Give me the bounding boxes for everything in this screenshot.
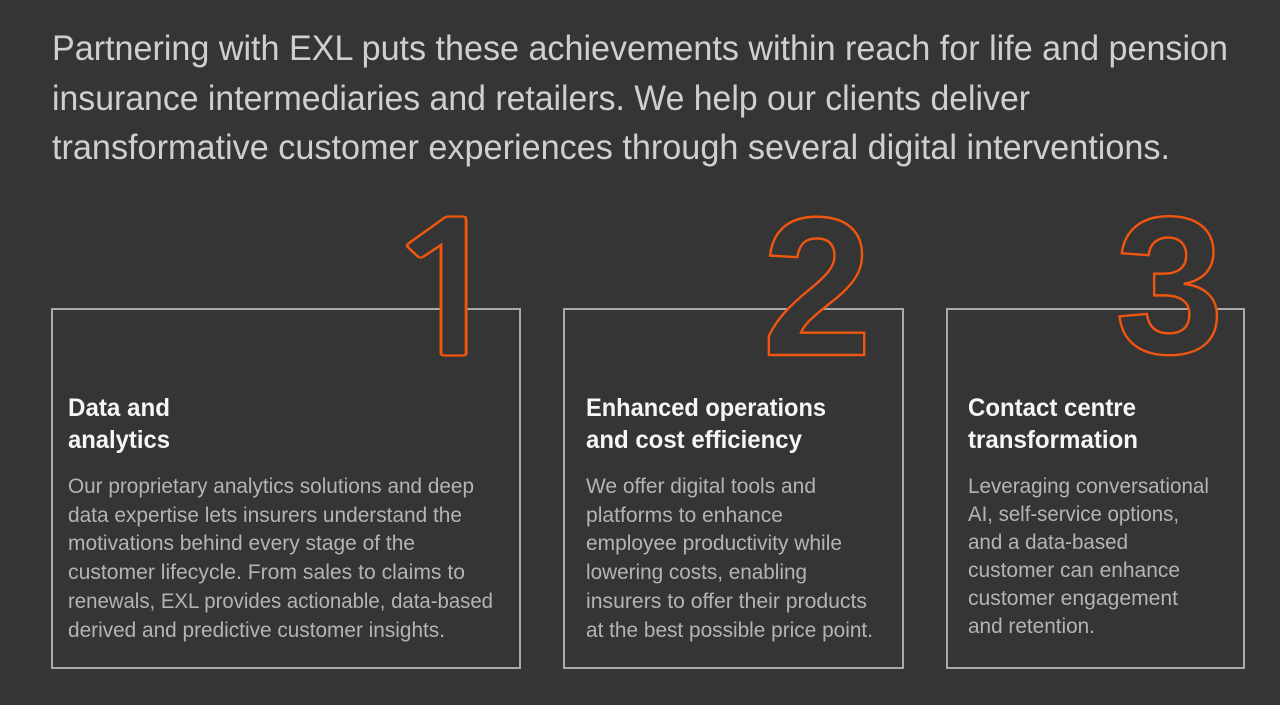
heading: enhanced operations: and cost efficiency — [586, 426, 802, 454]
text block: contact centre description — [968, 475, 1209, 638]
heading: enhanced operations: Enhanced operations — [586, 394, 826, 422]
heading: contact centre transformation — [968, 394, 1138, 454]
text block: contact centre description: and retention. — [968, 615, 1095, 638]
panel: enhanced operations and cost efficiency — [564, 176, 903, 668]
heading: contact centre transformation: Contact centre — [968, 394, 1136, 422]
title: introductory statement: transformative customer experiences through several digital interventions. — [52, 128, 1170, 167]
text block: data and analytics description: data expertise lets insurers understand the — [68, 504, 462, 527]
heading: data and analytics: Data and — [68, 394, 170, 422]
text block: data and analytics description — [68, 475, 493, 642]
title: introductory statement: insurance intermediaries and retailers. We help our clients deliver — [52, 79, 1030, 118]
text block: enhanced operations description: lowering costs, enabling — [586, 561, 807, 584]
text block: data and analytics description: renewals, EXL provides actionable, data-based — [68, 590, 493, 613]
text block: contact centre description: Leveraging conversational — [968, 475, 1209, 498]
panel: contact centre transformation — [947, 176, 1244, 668]
text block: data and analytics description: Our proprietary analytics solutions and deep — [68, 475, 474, 498]
heading: enhanced operations — [586, 394, 826, 454]
text block: data and analytics description: motivations behind every stage of the — [68, 532, 415, 555]
text block: data and analytics description: derived and predictive customer insights. — [68, 619, 445, 642]
text block: enhanced operations description — [586, 475, 873, 642]
text block: contact centre description: and a data-based — [968, 531, 1128, 554]
text block: enhanced operations description: insurers to offer their products — [586, 590, 867, 613]
text block: enhanced operations description: at the best possible price point. — [586, 619, 873, 642]
title: introductory statement: Partnering with EXL puts these achievements within reach for life and pension — [52, 29, 1228, 68]
text block: contact centre description: AI, self-service options, — [968, 503, 1179, 526]
text block: data and analytics description: customer lifecycle. From sales to claims to — [68, 561, 465, 584]
text block: contact centre description: customer can enhance — [968, 559, 1180, 582]
number 1: 1 — [377, 202, 520, 383]
text block: enhanced operations description: We offer digital tools and — [586, 475, 816, 498]
number 3: 3 — [1115, 176, 1224, 395]
number 2: 2 — [762, 176, 872, 397]
text block: enhanced operations description: employee productivity while — [586, 532, 842, 555]
heading: data and analytics — [68, 394, 170, 454]
title: introductory statement — [52, 29, 1228, 167]
text block: enhanced operations description: platforms to enhance — [586, 504, 783, 527]
heading: contact centre transformation: transformation — [968, 426, 1138, 454]
heading: data and analytics: analytics — [68, 426, 170, 454]
panel: data and analytics — [52, 202, 520, 668]
text block: contact centre description: customer engagement — [968, 587, 1178, 610]
